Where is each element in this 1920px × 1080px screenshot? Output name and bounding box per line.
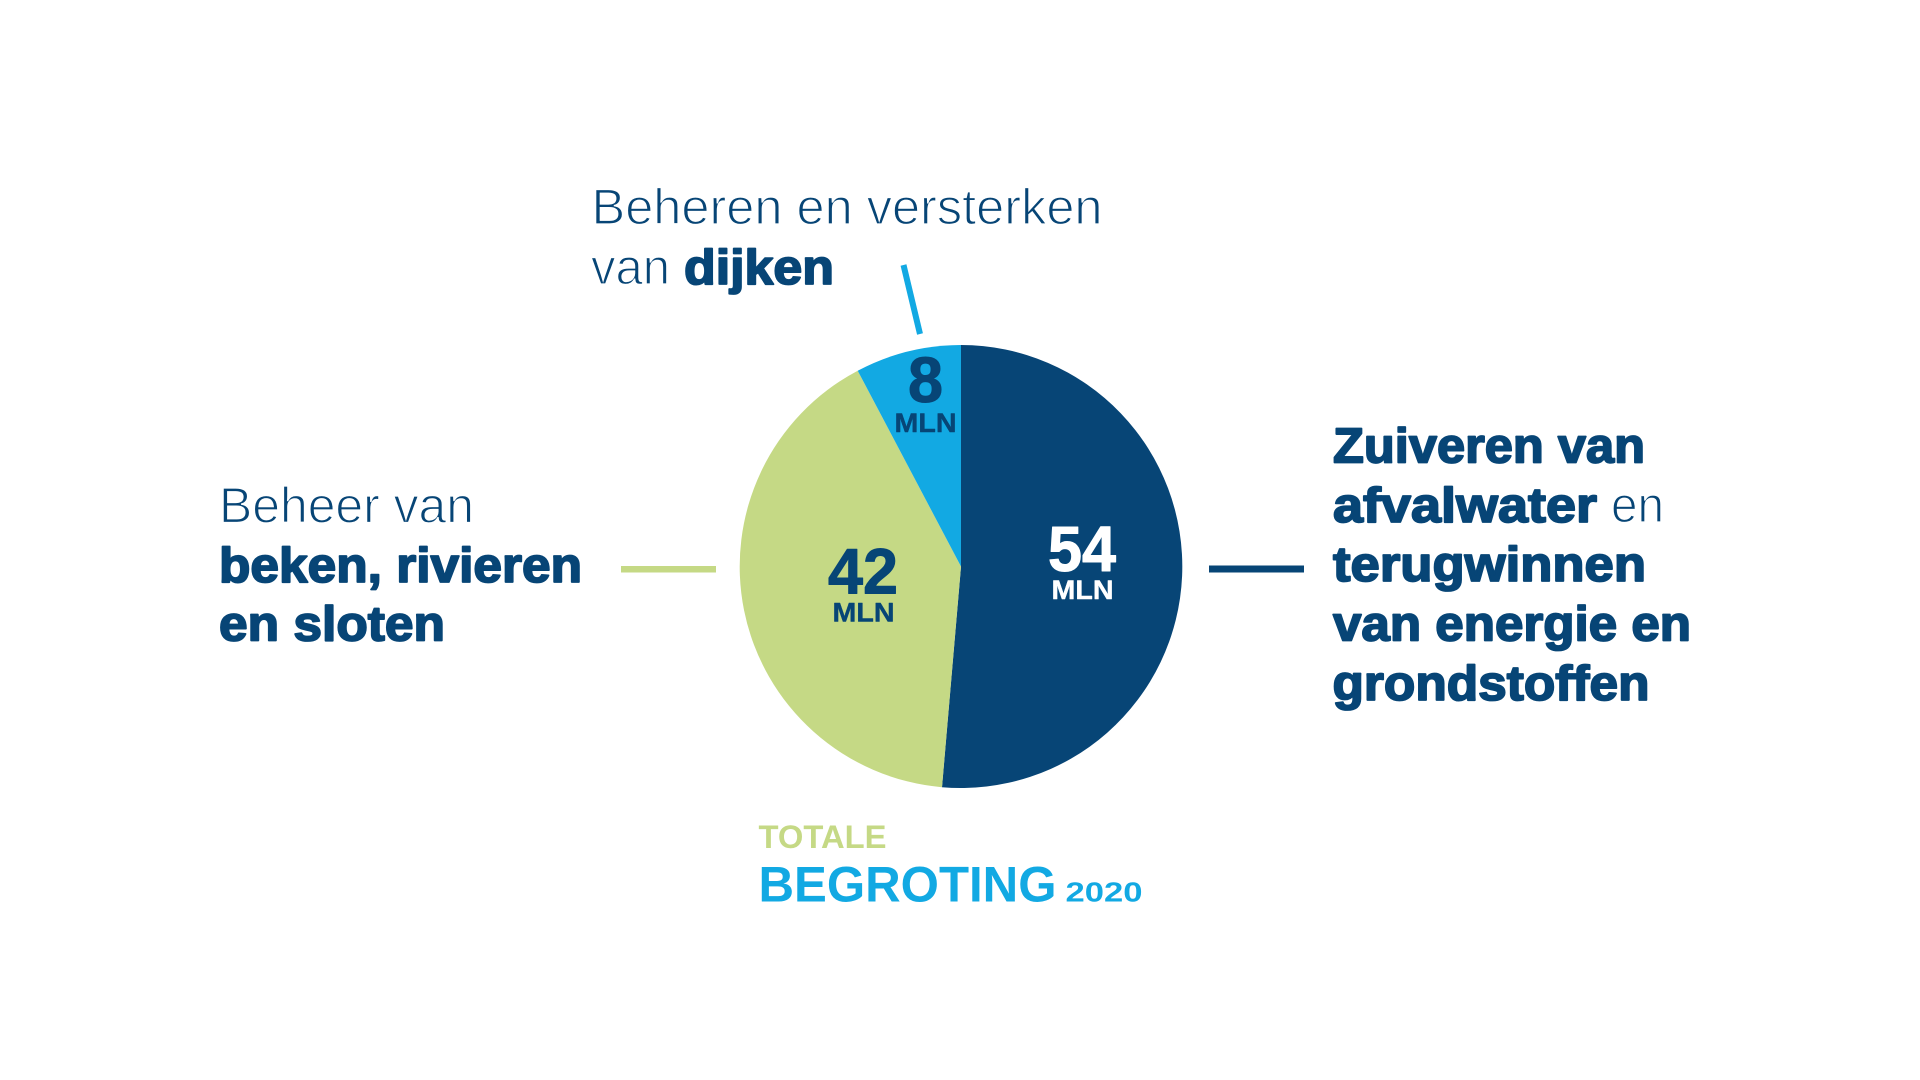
title line TOTALE: TOTALE [758,819,886,855]
connector line: dijken [904,265,920,334]
label line 2 light: van [591,239,670,295]
label line 2 bold: dijken [684,241,834,295]
number 42: 42 [828,536,898,608]
label: dijken [591,179,1102,295]
slice: 8 mln blue [858,345,961,566]
unit MLN: MLN [1052,575,1114,605]
slice: 42 mln green [740,371,961,787]
unit MLN: MLN [894,408,956,438]
number 8: 8 [908,344,943,416]
number 54: 54 [1048,513,1116,585]
title: totale begroting 2020 [758,819,1142,912]
pie chart [740,344,1182,788]
label line 3: en sloten [219,598,445,652]
label line 2: beken, rivieren [219,539,582,593]
title year 2020: 2020 [1066,876,1142,908]
value: 42 mln [828,536,898,628]
label: beken, rivieren en sloten [219,478,582,652]
label line 5: grondstoffen [1332,657,1650,711]
value: 8 mln [894,344,956,438]
label line 1: Beheren en versterken [592,179,1102,235]
label: zuiveren van afvalwater [1332,420,1691,711]
title line BEGROTING: BEGROTING [758,856,1056,912]
label line 1: Zuiveren van [1333,420,1645,474]
label line 2 light: en [1611,477,1664,533]
value: 54 mln [1048,513,1116,605]
label line 3: terugwinnen [1333,538,1646,592]
connector line: beken [621,566,716,572]
unit MLN: MLN [832,598,894,628]
label line 2 bold: afvalwater [1333,479,1597,533]
slice: 54 mln navy [942,345,1182,788]
label line 1: Beheer van [219,478,474,534]
label line 4: van energie en [1333,598,1691,652]
connector line: afvalwater [1209,566,1304,572]
